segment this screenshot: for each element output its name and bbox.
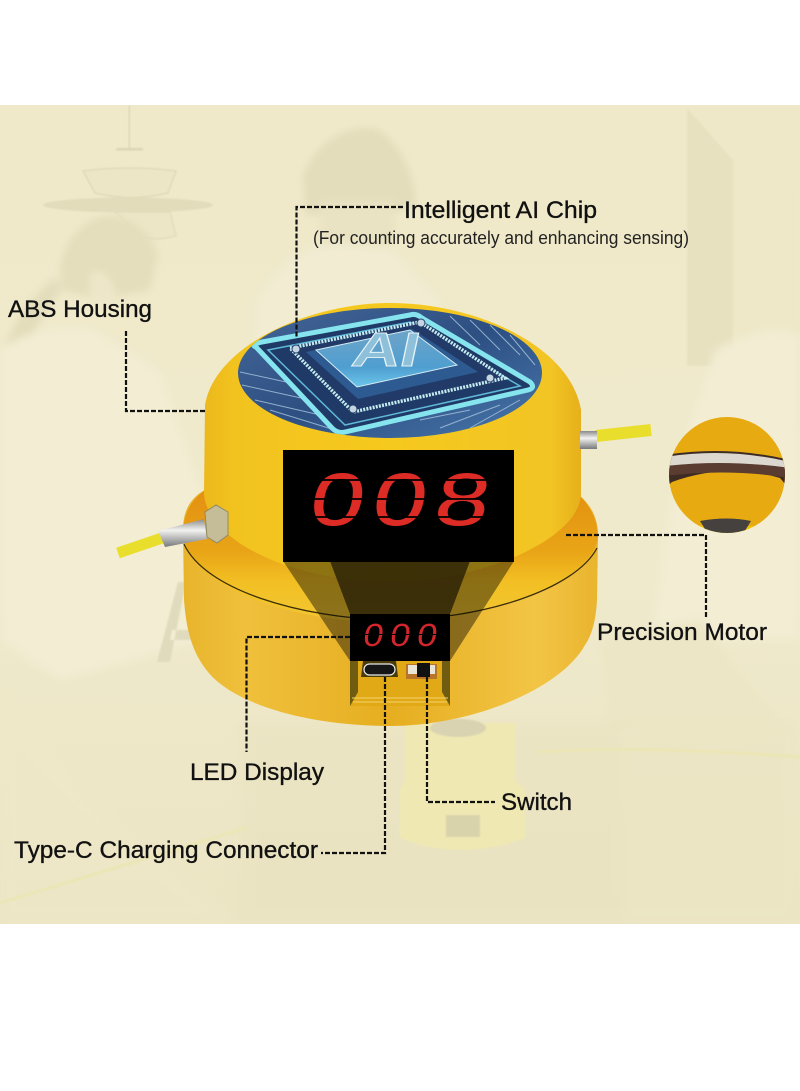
upper cylinder [204, 303, 581, 582]
right-side figure [709, 333, 797, 631]
boy silhouette [304, 129, 414, 214]
small LED display: 0 [361, 618, 386, 653]
niche [350, 661, 450, 706]
Type-C port [361, 661, 398, 677]
funnel inner [330, 561, 470, 614]
faded yellow cable [0, 749, 800, 903]
chip substrate [290, 322, 505, 412]
circuit traces [240, 316, 535, 430]
ceiling lamp [43, 105, 213, 239]
small LED display [350, 614, 450, 661]
faded A letter [158, 582, 190, 662]
callout: Precision Motor [566, 535, 767, 646]
callout: Type-C Charging Connector [14, 677, 385, 864]
chip mid layer [306, 329, 478, 399]
base cylinder [183, 482, 598, 726]
callout: ABS Housing [8, 296, 206, 411]
large LED display: 0 [305, 459, 371, 541]
large LED display: 8 [430, 459, 496, 541]
callout: Intelligent AI Chip: (For counting accurately and enhancing sensing) [313, 228, 689, 248]
product: rope counter device [118, 300, 651, 726]
callout: Intelligent AI Chip: Intelligent AI Chip [404, 197, 597, 224]
callout: Switch: Switch [501, 789, 572, 816]
callout: ABS Housing: ABS Housing [8, 296, 152, 323]
AI chip artwork [238, 308, 542, 438]
pins [292, 345, 300, 353]
wall panel [688, 112, 732, 366]
chip AI lettering: AI [348, 323, 425, 377]
callout: LED Display: LED Display [190, 759, 324, 786]
floor texture [0, 700, 800, 924]
callout: Switch [427, 677, 572, 816]
cable right [580, 430, 651, 449]
callout: Intelligent AI Chip [296, 197, 689, 338]
large LED display: 0 [367, 459, 434, 541]
cable left [118, 505, 228, 553]
callout: Type-C Charging Connector: Type-C Charging Connector [14, 837, 318, 864]
small LED display: 0 [388, 618, 413, 653]
inset: motor close-up [669, 417, 785, 533]
inner frame line [268, 322, 520, 425]
glow frame [254, 314, 533, 432]
funnel projection [283, 561, 514, 661]
chip die [316, 330, 457, 387]
large LED display [283, 450, 514, 562]
callout: Precision Motor: Precision Motor [597, 619, 767, 646]
small faded device on floor [400, 719, 525, 850]
faded photo background [0, 105, 800, 924]
ring seam line [184, 544, 597, 620]
power switch [406, 663, 437, 679]
small LED display: 0 [415, 618, 440, 653]
base ledge top [183, 482, 598, 622]
callout: LED Display [190, 637, 350, 786]
girl silhouette [9, 216, 162, 674]
